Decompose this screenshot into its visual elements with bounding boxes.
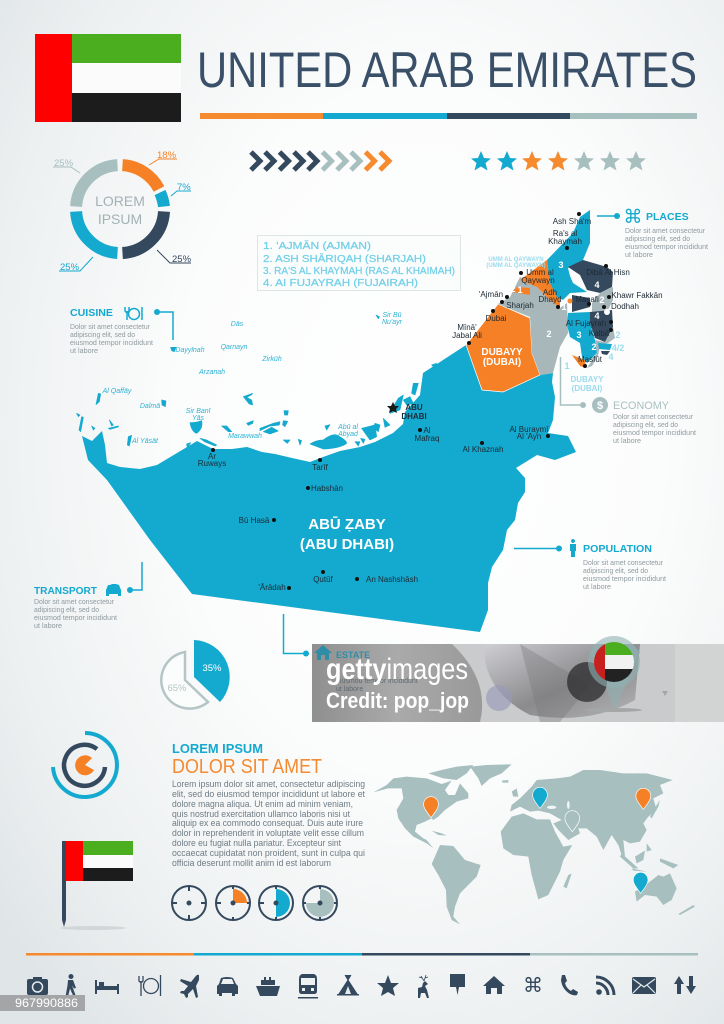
callout: cuisine: ut labore [70,346,98,355]
city labels: Khaymah [548,237,582,246]
circular logo icon [53,733,117,797]
Dubai region name: DUBAYY [481,347,523,358]
city labels: Adh [543,288,557,297]
city labels: 'Ārādah [258,583,286,592]
emirates legend box: 3. RA'S AL KHAYMAH (RAS AL KHAIMAH) [263,265,455,277]
callout: cuisine: adipiscing elit, sed do [70,330,135,339]
pie chart [161,640,230,709]
emirate numbers: 4 [594,280,600,290]
offshore islands [77,315,437,449]
donut label 25% blue: 25% [60,262,80,273]
city labels: Jabal Ali [452,331,482,340]
callout: cuisine [70,307,173,355]
city labels: Al 'Ayn [517,432,541,441]
text block: lorem ipsum: Lorem ipsum dolor sit amet, consectetur adipiscing [172,779,365,789]
emirate numbers: 1 [561,302,567,312]
city labels: Mīnā' [457,323,477,332]
map of the UAE [77,210,663,632]
emirate numbers: 2 [599,295,605,305]
map pins [424,787,651,893]
emirate numbers: 4/2 [612,343,624,353]
city labels: Masafi [575,295,599,304]
estate label under watermark: eiusmod tempor incididunt [336,678,418,685]
callout: cuisine: CUISINE [70,307,113,319]
chevron arrows [251,152,389,170]
clock: three quarters [303,886,337,920]
city labels: Qutūf [313,575,334,584]
island labels: Abū al [337,424,358,431]
callout: transport: eiusmod tempor incididunt [34,613,117,622]
icon: dollar: $ [597,400,603,412]
Dubai region name [481,347,523,368]
city labels: Dubai [486,314,507,323]
city labels: Dhayd [538,295,562,304]
icon: rss [596,977,614,995]
watermark text: gettyimages [326,653,468,686]
text block: lorem ipsum: LOREM IPSUM [172,741,263,756]
watermark text [326,653,469,713]
watermark banner [312,636,724,722]
island labels: Arzanah [198,369,225,376]
island labels: Marawwah [228,433,262,440]
city labels: Mafraq [415,434,439,443]
icon: walker [66,974,76,996]
island labels [102,312,403,445]
callout: cuisine: Dolor sit amet consectetur [70,322,151,331]
city labels: Kalbā [589,329,610,338]
Abu Dhabi region name: ABŪ ẒABY [308,516,386,533]
icon: plane [180,975,199,998]
callout: population: Dolor sit amet consectetur [583,558,664,567]
city labels: Bū Hasā [239,516,270,525]
light region labels [486,257,604,393]
emirate numbers: 1 [564,361,570,371]
emirates legend box: 2. ASH SHĀRIQAH (SHARJAH) [263,253,426,265]
city labels: Al [423,426,431,435]
emirate numbers: 3 [558,260,564,270]
city labels: ABU [405,403,423,412]
flag on pole [60,841,133,930]
city labels: Al Fujayrah [566,319,606,328]
city labels: Ra's al [553,229,577,238]
Abu Dhabi region name: (ABU DHABI) [300,536,394,553]
city labels: Habshān [311,484,343,493]
island labels: Qarnayn [221,344,248,351]
light region labels: DUBAYY [570,375,604,384]
island labels: Dalmā [140,403,160,410]
city labels: DHABI [401,412,427,421]
clock: half [259,886,293,920]
text block: lorem ipsum: elit, sed do eiusmod tempor incididunt ut labore et [172,789,365,799]
icon: cutlery [125,307,142,320]
region: Umm al Qaywayn [520,260,560,308]
callout: transport: ut labore [34,621,62,630]
region: Dubai [466,304,540,392]
callout: economy [560,357,696,445]
callout: places: eiusmod tempor incididunt [625,242,708,251]
island labels: Dayyīnah [175,347,205,354]
light region labels: (UMM AL QAYWAYN) [486,263,546,269]
icon: tent [337,975,359,996]
text block: lorem ipsum: dolore eu fugiat nulla pariatur. Excepteur sint [172,838,341,848]
callout: transport [34,562,142,630]
callout: economy: ut labore [613,436,641,445]
icon: pin flag [450,974,465,995]
icon row [27,973,696,998]
island labels: Abyad [337,431,359,438]
callout: economy: Dolor sit amet consectetur [613,412,694,421]
icon: car [217,977,238,996]
city labels: Khawr Fakkān [611,291,663,300]
emirate numbers [510,260,624,371]
emirate numbers: 4 [608,352,614,362]
icon: house [483,976,505,994]
callout: places: PLACES [646,211,689,223]
donut chart [53,150,192,273]
star rating [471,151,646,170]
region: Fujairah south [590,310,613,342]
emirate numbers: 2 [591,342,597,352]
emirates legend box [258,236,460,290]
capital: Abu Dhabi star [387,402,399,413]
callout: population [514,539,666,591]
callout: population: ut labore [583,582,611,591]
city labels [198,217,663,592]
callout: places: Dolor sit amet consectetur [625,226,706,235]
icon: deer [418,975,429,998]
callout: cuisine: eiusmod tempor incididunt [70,338,153,347]
city labels: An Nashshāsh [366,575,418,584]
region: Ras al Khaimah south [567,312,597,363]
continents: Eurasia, Africa, Oceania [501,770,695,915]
city labels: Al Buraymī [509,425,549,434]
city labels: Masfūt [578,355,603,364]
estate label under watermark: ESTATE [336,650,370,660]
city labels: Ar [208,452,216,461]
Dubai region name: (DUBAI) [483,357,521,368]
callout: places: ut labore [625,250,653,259]
text block: lorem ipsum: aliquip ex ea commodo consequat. Duis aute irure [172,818,363,828]
emirate numbers: 4 [594,311,600,321]
island labels: Al Qaffāy [102,388,132,395]
icon: phone [561,975,578,995]
watermark text: Credit: pop_jop [326,688,469,713]
callout line: estate [284,614,309,656]
callout: places: adipiscing elit, sed do [625,234,690,243]
island labels: Zirkūh [261,356,282,363]
city labels: Ash Sha'm [553,217,592,226]
icon: car [106,584,121,596]
emirate numbers: 2 [546,329,552,339]
donut label 18%: 18% [157,150,177,161]
city labels: Al Khaznah [463,445,503,454]
icon: camera [27,977,48,995]
callout: transport: Dolor sit amet consectetur [34,597,115,606]
icon: star [377,975,399,996]
text block: lorem ipsum [172,741,365,868]
region: Ajman [512,287,530,295]
bottom colour bar [26,953,698,956]
clock: empty [172,886,206,920]
callout: economy: adipiscing elit, sed do [613,420,678,429]
city labels: Dibā Al Hisn [586,268,630,277]
clock: quarter [216,886,250,920]
clock icons [172,886,337,920]
emirate numbers: 2 [615,330,621,340]
callout: economy: ECONOMY [613,400,670,412]
emirates legend box: 4. AI FUJAYRAH (FUJAIRAH) [263,277,418,289]
icon: cutlery [139,975,160,996]
city labels: 'Ajmān [479,290,503,299]
icon: person [570,539,576,557]
island labels: Dās [231,321,244,328]
flag: header [35,34,181,122]
text block: lorem ipsum: quis nostrud exercitation ullamco laboris nisi ut [172,809,350,819]
text block: lorem ipsum: occaecat cupidatat non proident, sunt in culpa qui [172,848,365,858]
world map [373,764,695,924]
city labels: Umm al [526,268,554,277]
callout: population: adipiscing elit, sed do [583,566,648,575]
callout: transport: TRANSPORT [34,585,98,597]
emirate numbers: 3 [576,330,582,340]
light region labels: (DUBAI) [572,384,603,393]
callout: transport: adipiscing elit, sed do [34,605,99,614]
icon: train [298,974,318,998]
estate label under watermark: ut labore [336,686,363,693]
callout: population: eiusmod tempor incididunt [583,574,666,583]
island labels: Sir Banī [186,408,212,415]
donut chart: LOREM [95,193,145,209]
island labels: Sir Bū [382,312,402,319]
pie chart: 35% [202,663,222,674]
donut label 25% dark: 25% [172,254,192,265]
emirate numbers: 2 [510,284,516,294]
icon: envelope [632,977,656,994]
island labels: Al Yāsāt [131,438,159,445]
emirate numbers: 1 [517,285,523,295]
icon: bed [95,980,119,994]
island labels: Yās [192,415,205,422]
donut label 7%: 7% [177,182,191,193]
region: Ras al Khaimah north [547,210,590,300]
region: Kalba [587,327,615,368]
estate label under watermark [314,645,418,693]
island labels: Nu'ayr [382,319,403,326]
emirates legend box: 1. 'AJMĀN (AJMAN) [263,240,371,252]
pie chart: 65% [167,683,187,694]
icon: arrows [674,976,696,994]
icon: places: ⌘ [624,206,642,228]
region: Sharjah [498,277,568,375]
city labels: Ruways [198,459,226,468]
region: Fujairah enclave [572,295,590,312]
city labels: Tarīf [312,463,329,472]
title colour bar [200,113,697,119]
text block: lorem ipsum: DOLOR SIT AMET [172,756,322,778]
text block: lorem ipsum: officia deserunt mollit anim id est laborum [172,858,331,868]
city labels: Qaywayn [521,276,555,285]
region: Fujairah north [568,260,613,293]
image number tag: 967990886 [15,996,78,1010]
pin with flag [588,636,640,688]
text block: lorem ipsum: dolor in reprehenderit in voluptate velit esse cillum [172,828,364,838]
icon: ship [256,977,280,996]
callout: places [597,206,708,259]
city dots [211,212,613,590]
text block: lorem ipsum: dolore magna aliqua. Ut enim ad minim veniam, [172,799,353,809]
Abu Dhabi region name [300,516,394,553]
callout: economy: eiusmod tempor incididunt [613,428,696,437]
donut chart: IPSUM [98,211,142,227]
image number tag [0,995,85,1011]
city labels: Dodhah [611,302,639,311]
city labels: Sharjah [506,301,534,310]
region: Abu Dhabi [82,345,576,632]
region: Sharjah east [592,287,613,312]
light region labels: UMM AL QAYWAYN [488,257,544,263]
icon: command: ⌘ [523,973,543,997]
callout: population: POPULATION [583,543,652,555]
continents: Americas and Greenland [373,764,512,924]
donut label 25% gray: 25% [54,158,74,169]
